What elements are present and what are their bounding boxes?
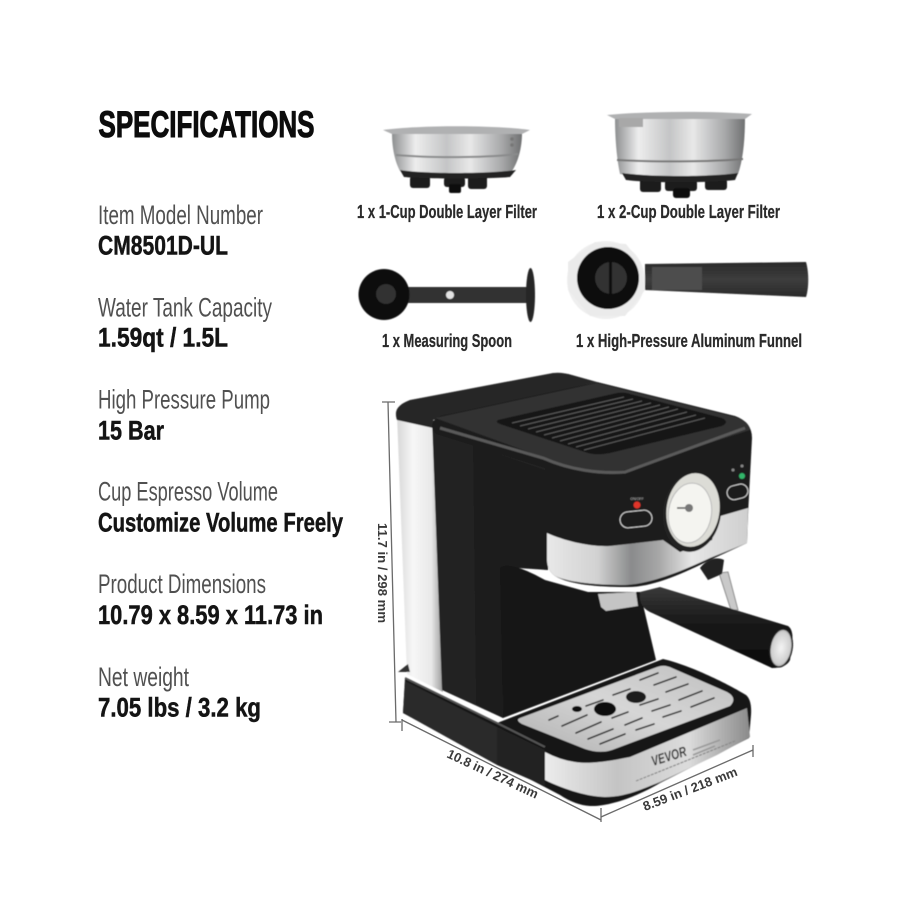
- water tank side: [397, 415, 443, 692]
- spec: cup espresso volume: Customize Volume Freely: [98, 508, 343, 538]
- portafilter: [598, 587, 795, 669]
- caption: 2-cup filter: 1 x 2-Cup Double Layer Filter: [597, 202, 780, 222]
- spec: high pressure pump: [98, 384, 270, 446]
- caption: 1-cup filter: 1 x 1-Cup Double Layer Filter: [357, 202, 537, 222]
- accessory: 2-cup filter: [607, 112, 752, 198]
- spec: high pressure pump: High Pressure Pump: [98, 384, 270, 414]
- dimension: length: [402, 719, 601, 822]
- top surface: [435, 383, 750, 471]
- drip tray: [518, 666, 733, 752]
- recess: [500, 566, 656, 718]
- accessory: measuring spoon: [358, 268, 535, 322]
- spec: product dimensions: [98, 569, 323, 630]
- spec: net weight: Net weight: [98, 662, 189, 692]
- body centre panel: [473, 445, 548, 718]
- caption: measuring spoon: 1 x Measuring Spoon: [382, 331, 512, 351]
- on/off button: [619, 497, 653, 529]
- front chrome panel: [545, 708, 750, 797]
- dimension: height: [375, 402, 401, 722]
- main body: [432, 420, 548, 718]
- base corner face: [497, 727, 545, 786]
- spec: product dimensions: Product Dimensions: [98, 569, 266, 599]
- coffee machine: [396, 373, 795, 806]
- back lid: [396, 373, 597, 428]
- spec: net weight: [98, 662, 261, 722]
- base: [403, 659, 751, 806]
- spec: water tank capacity: Water Tank Capacity: [98, 292, 272, 322]
- pressure gauge: [658, 468, 726, 556]
- caption: aluminum funnel: 1 x High-Pressure Aluminum Funnel: [576, 331, 802, 351]
- front rim highlight: [440, 428, 745, 472]
- spec: cup espresso volume: Cup Espresso Volume: [98, 476, 278, 506]
- spec: water tank capacity: [98, 292, 272, 352]
- dimension: length: 10.8 in / 274 mm: [445, 746, 541, 802]
- chrome band: [547, 508, 748, 585]
- spec: item model number: CM8501D-UL: [98, 230, 228, 260]
- dimension: width: 8.59 in / 218 mm: [641, 764, 739, 814]
- spec: water tank capacity: 1.59qt / 1.5L: [98, 322, 228, 352]
- head: [432, 382, 752, 587]
- spec: high pressure pump: 15 Bar: [98, 416, 164, 446]
- spec: net weight: 7.05 lbs / 3.2 kg: [98, 692, 261, 722]
- spec: item model number: Item Model Number: [98, 200, 263, 230]
- front chrome panel: VEVOR: [649, 743, 689, 769]
- on/off button: ON/OFF: [630, 497, 644, 501]
- grill: [497, 393, 726, 454]
- base rim highlight: [405, 678, 545, 747]
- spec: cup espresso volume: [98, 476, 343, 538]
- dimension: width: [601, 745, 753, 817]
- spec list: [98, 200, 343, 722]
- spec: item model number: [98, 200, 263, 260]
- dimension: height: 11.7 in / 298 mm: [375, 523, 390, 623]
- accessory: aluminum funnel: [567, 241, 808, 319]
- base side face: [403, 681, 497, 765]
- title: SPECIFICATIONS: [98, 103, 314, 145]
- spec: product dimensions: 10.79 x 8.59 x 11.73 in: [98, 600, 323, 630]
- power cord: [398, 664, 410, 672]
- steam wand: [700, 558, 738, 610]
- accessory: 1-cup filter: [383, 126, 530, 193]
- steam switch: [726, 464, 749, 501]
